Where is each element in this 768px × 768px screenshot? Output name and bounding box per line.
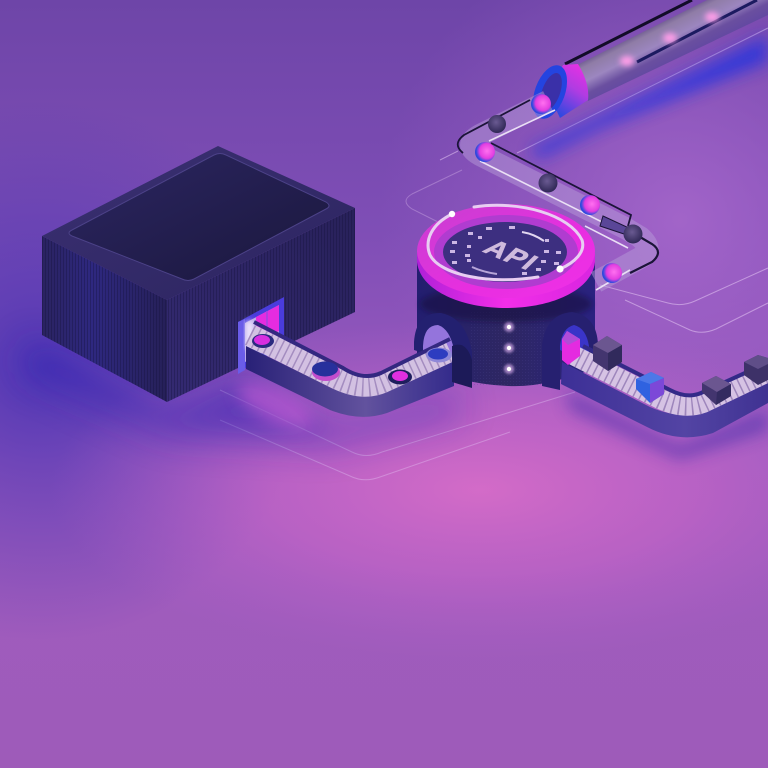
API dial face	[443, 222, 567, 282]
tower under-ring shadow	[420, 286, 592, 322]
dark box 1	[593, 336, 622, 371]
warehouse roof	[42, 146, 355, 300]
pink box	[562, 331, 580, 365]
ring side	[417, 253, 595, 308]
shadows on floor	[20, 35, 768, 460]
warehouse wall ribs	[42, 208, 355, 402]
warehouse left wall	[42, 236, 167, 402]
pipe barrel	[577, 0, 768, 101]
conveyor left rail	[254, 322, 450, 376]
parcel disc 3	[388, 370, 412, 384]
tube glass	[471, 101, 648, 282]
transfer tube	[458, 94, 658, 290]
conveyor right rail	[583, 346, 745, 395]
tower body	[417, 258, 595, 386]
ring top	[417, 204, 595, 298]
conveyor right wall	[561, 362, 768, 437]
tower lights	[504, 322, 514, 374]
arc end lights	[449, 211, 564, 273]
floor guide lines	[220, 28, 768, 480]
API tower	[414, 204, 598, 390]
conveyor left belt	[250, 335, 450, 386]
left arch pillar	[452, 345, 472, 388]
large pipe	[526, 0, 768, 123]
left arch opening	[414, 313, 472, 362]
dark box 2	[702, 376, 731, 405]
API label: API	[477, 235, 545, 275]
tube lower connector	[600, 216, 629, 234]
tube balls	[475, 94, 642, 283]
parcel disc 2	[312, 362, 340, 381]
pipe glowing spots	[620, 12, 719, 66]
conveyor right belt	[573, 355, 768, 406]
pipe collar opening	[526, 61, 574, 123]
dial markers	[450, 226, 561, 275]
conveyor right	[561, 331, 768, 437]
pipe top edge	[565, 0, 692, 64]
right arch	[542, 312, 598, 390]
tube light edges	[480, 110, 630, 290]
recessed inner ring	[434, 215, 578, 289]
pipe dark stripe	[637, 0, 757, 62]
parcel disc 4	[426, 348, 452, 362]
outer light arcs	[428, 205, 583, 280]
tube dark edges	[458, 100, 658, 273]
warehouse right wall	[167, 208, 355, 402]
warehouse building	[42, 146, 355, 402]
pipe collar band	[548, 64, 588, 118]
parcel disc 1	[252, 334, 274, 348]
dark box 3	[744, 355, 768, 385]
conveyor left	[246, 322, 454, 417]
warehouse roof panel	[69, 154, 329, 280]
conveyor left wall	[246, 346, 454, 417]
warehouse doorway	[238, 297, 284, 374]
blue box	[636, 372, 664, 403]
